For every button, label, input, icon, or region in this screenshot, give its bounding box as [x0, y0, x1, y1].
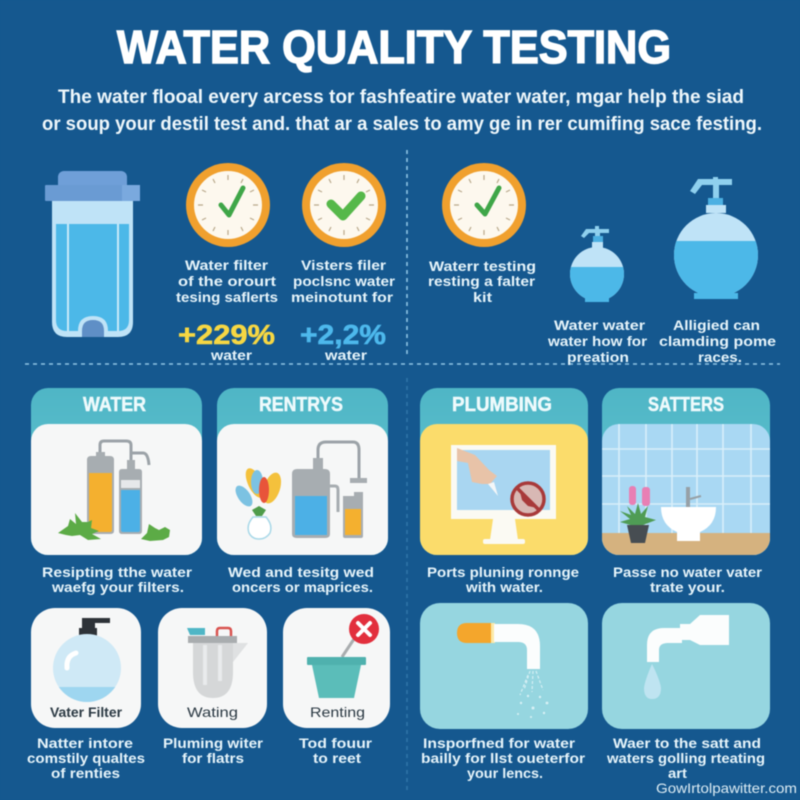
text: small bottle: water how for [547, 333, 648, 349]
caption: renting card: to reet [313, 750, 361, 766]
icon: flowers and filter jug [232, 442, 367, 539]
text: stat two [291, 257, 396, 363]
text: stat one: water [210, 347, 253, 363]
text: large bottle: races. [698, 349, 742, 365]
intro text: or soup your destil test and. that ar a sales to amy ge in rer cumifing sace festing. [42, 114, 762, 135]
text: stat two: water [324, 347, 368, 363]
caption: satters: trate your. [650, 579, 725, 595]
caption: dripping tap [606, 735, 765, 781]
caption: rentrys [228, 564, 374, 595]
panel: rentrys [217, 388, 388, 595]
clock check 1 [186, 163, 270, 247]
text: small bottle: preation [567, 349, 629, 365]
caption: renting card: Tod fouur [299, 735, 373, 751]
heading: water: WATER [83, 394, 146, 416]
title: WATER QUALITY TESTING [117, 21, 671, 73]
heading: satters: SATTERS [648, 394, 724, 416]
caption: wating card: Pluming witer [163, 735, 264, 751]
caption: dripping tap: waters golling rteating [606, 750, 765, 766]
icon: bucket with red cross [307, 614, 379, 698]
panel: satters [602, 388, 770, 595]
label: vater filter: Vater Filter [50, 704, 123, 720]
text: large bottle: Alligied can [673, 317, 760, 333]
icon: trap pipe [187, 628, 248, 698]
caption: spraying tap [421, 735, 586, 781]
panel: dripping tap [602, 603, 770, 781]
caption: wating card [163, 735, 264, 766]
icon: water filter cartridge [45, 171, 140, 337]
card: water filter icon [31, 608, 141, 728]
text: stat one: of the orourt [178, 273, 276, 289]
text: stat two: Visters filer [301, 257, 387, 273]
icon: pump bottle [53, 618, 121, 703]
caption: filter card: comstily qualtes [27, 750, 145, 766]
caption: filter card: of renties [51, 765, 120, 781]
caption: wating card: for flatrs [182, 750, 244, 766]
clock check 2 [302, 163, 386, 247]
icon: tap with drop [644, 615, 729, 699]
caption: spraying tap: your lencs. [467, 765, 543, 781]
icon: large pump bottle [674, 177, 758, 301]
label: renting: Renting [310, 704, 365, 720]
text: stat one [176, 257, 278, 363]
card: renting icon [283, 608, 390, 728]
caption: plumbing: with water. [465, 579, 543, 595]
icon: monitor with hand and prohibition sign [451, 445, 556, 544]
text: stat two: +2,2% [300, 319, 386, 350]
icon: small pump bottle [570, 226, 624, 302]
intro text: The water flooal every arcess tor fashfeatire water water, mgar help the siad [58, 87, 744, 108]
text: stat two: meinotunt for [291, 289, 394, 305]
text: large bottle: clamding pome [659, 333, 776, 349]
text: large bottle [659, 317, 776, 365]
caption: filter card: Natter intore [37, 735, 133, 751]
text: stat one: Water filter [185, 257, 269, 273]
caption: satters [613, 564, 763, 595]
text: testing kit: Waterr testing [429, 258, 536, 274]
label: wating: Wating [187, 704, 238, 720]
icon: tap with spray [457, 623, 548, 718]
clock check 3 [442, 163, 526, 247]
caption: plumbing [427, 564, 579, 595]
heading: rentrys: RENTRYS [259, 394, 343, 416]
text: small bottle [547, 317, 648, 365]
caption: filter card [27, 735, 145, 781]
text: testing kit: resting a falter [428, 273, 536, 289]
icon: tiled bathroom with sink and plant [602, 424, 770, 555]
caption: water: Resipting tthe water [42, 564, 193, 580]
text: testing kit [428, 258, 536, 305]
panel: spraying tap [420, 603, 588, 781]
caption: plumbing: Ports pluning ronnge [427, 564, 579, 580]
intro text [42, 87, 762, 135]
caption: dripping tap: Waer to the satt and [613, 735, 761, 751]
caption: water [42, 564, 193, 595]
watermark: GowIrtolpawitter.com [656, 780, 797, 796]
text: stat two: poclsnc water [293, 273, 396, 289]
caption: satters: Passe no water vater [613, 564, 763, 580]
caption: spraying tap: Insporfned for water [423, 735, 576, 751]
icon: two filters with leaves [58, 441, 170, 541]
text: testing kit: kit [473, 289, 492, 305]
panel: water [31, 388, 202, 595]
text: small bottle: Water water [554, 317, 646, 333]
caption: renting card [299, 735, 373, 766]
heading: plumbing: PLUMBING [452, 394, 552, 416]
caption: dripping tap: art [668, 765, 687, 781]
text: stat one: +229% [178, 319, 275, 350]
caption: water: waefg your filters. [51, 579, 184, 595]
text: stat one: tesing saflerts [176, 289, 278, 305]
panel: plumbing [420, 388, 588, 595]
caption: rentrys: oncers or maprices. [232, 579, 373, 595]
caption: rentrys: Wed and tesitg wed [228, 564, 374, 580]
caption: spraying tap: bailly for llst oueterfor [421, 750, 586, 766]
card: wating icon [158, 608, 267, 728]
